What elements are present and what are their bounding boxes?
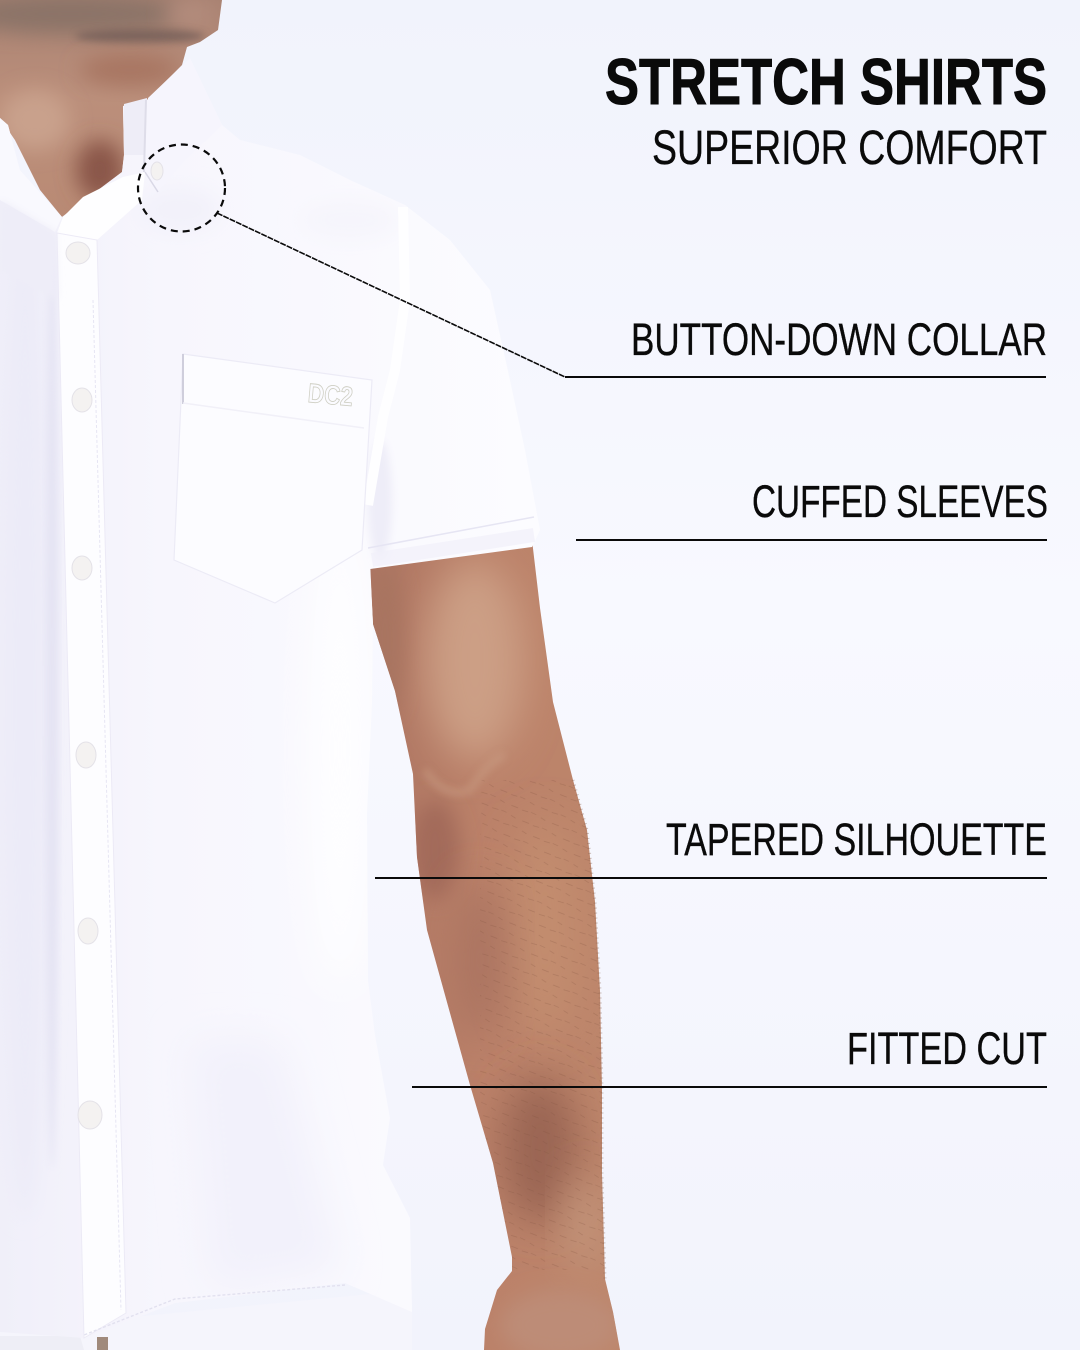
photo: shirt placket with stitching <box>57 233 126 1338</box>
callout: collar circle and leader line <box>138 144 565 377</box>
photo: shirt pocket <box>174 354 372 603</box>
photo: model arm <box>367 540 620 1350</box>
title block <box>605 45 1047 175</box>
photo: model neck and chin <box>0 0 222 217</box>
photo: shirt buttons <box>66 162 163 1129</box>
photo: sleeve seam and cuff <box>368 207 534 560</box>
photo: collar <box>0 58 222 300</box>
photo: placket top band <box>57 172 145 240</box>
photo: arm hair edge <box>573 780 605 1279</box>
photo: belt strap <box>97 1337 108 1350</box>
photo: white shirt <box>0 58 540 1338</box>
photo: hem stitching <box>84 1285 345 1335</box>
logo: DC2 on pocket: DC2 <box>307 378 354 412</box>
photo: white trousers <box>0 1290 412 1350</box>
